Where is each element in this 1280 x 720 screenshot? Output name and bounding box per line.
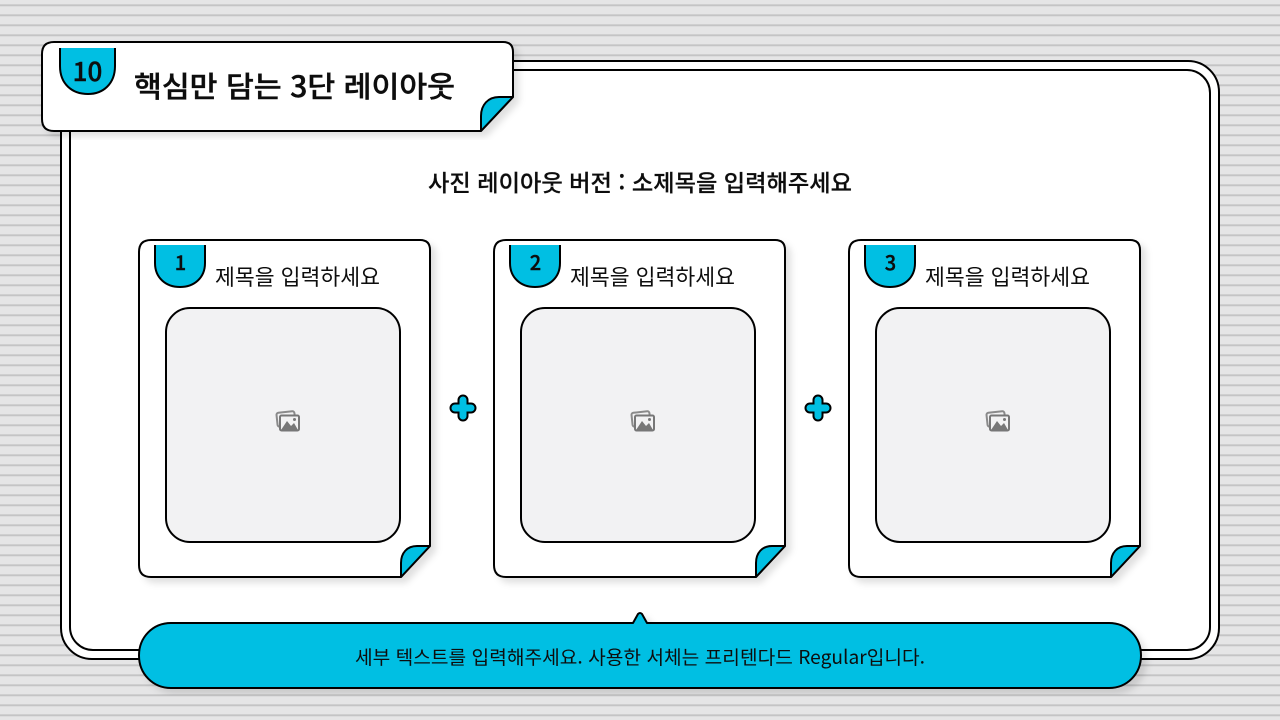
- title number tab: 10: [73, 52, 102, 89]
- bottom callout: [139, 613, 1141, 688]
- icon: card 2 page fold: [756, 546, 785, 577]
- panel: card 1: [139, 240, 430, 577]
- card 3 number tab: 3: [885, 247, 896, 276]
- icon: plus 1: [455, 400, 471, 416]
- card 1 number tab: [155, 245, 205, 287]
- callout text: 세부 텍스트를 입력해주세요. 사용한 서체는 프리텐다드 Regular입니다.: [355, 643, 925, 670]
- card 2 image placeholder: [521, 308, 755, 542]
- card 2 heading: 제목을 입력하세요: [570, 260, 735, 292]
- title panel: [42, 42, 513, 131]
- card 1 image placeholder: [166, 308, 400, 542]
- outer frame panel: [61, 61, 1219, 659]
- icon: card 1 page fold: [401, 546, 430, 577]
- title number tab: [60, 48, 115, 94]
- icon: plus 2: [810, 400, 826, 416]
- card 3 heading: 제목을 입력하세요: [925, 260, 1090, 292]
- card 1 heading: 제목을 입력하세요: [215, 260, 380, 292]
- panel: card 2: [494, 240, 785, 577]
- title text: 핵심만 담는 3단 레이아웃: [134, 64, 455, 106]
- card 3 number tab: [865, 245, 915, 287]
- subtitle: 사진 레이아웃 버전 : 소제목을 입력해주세요: [428, 164, 852, 198]
- card 1 number tab: 1: [175, 247, 186, 276]
- icon: card 3 page fold: [1111, 546, 1140, 577]
- card 2 number tab: [510, 245, 560, 287]
- card 3 image placeholder: [876, 308, 1110, 542]
- card 2 number tab: 2: [530, 247, 541, 276]
- panel: card 3: [849, 240, 1140, 577]
- icon: title page fold: [481, 97, 513, 131]
